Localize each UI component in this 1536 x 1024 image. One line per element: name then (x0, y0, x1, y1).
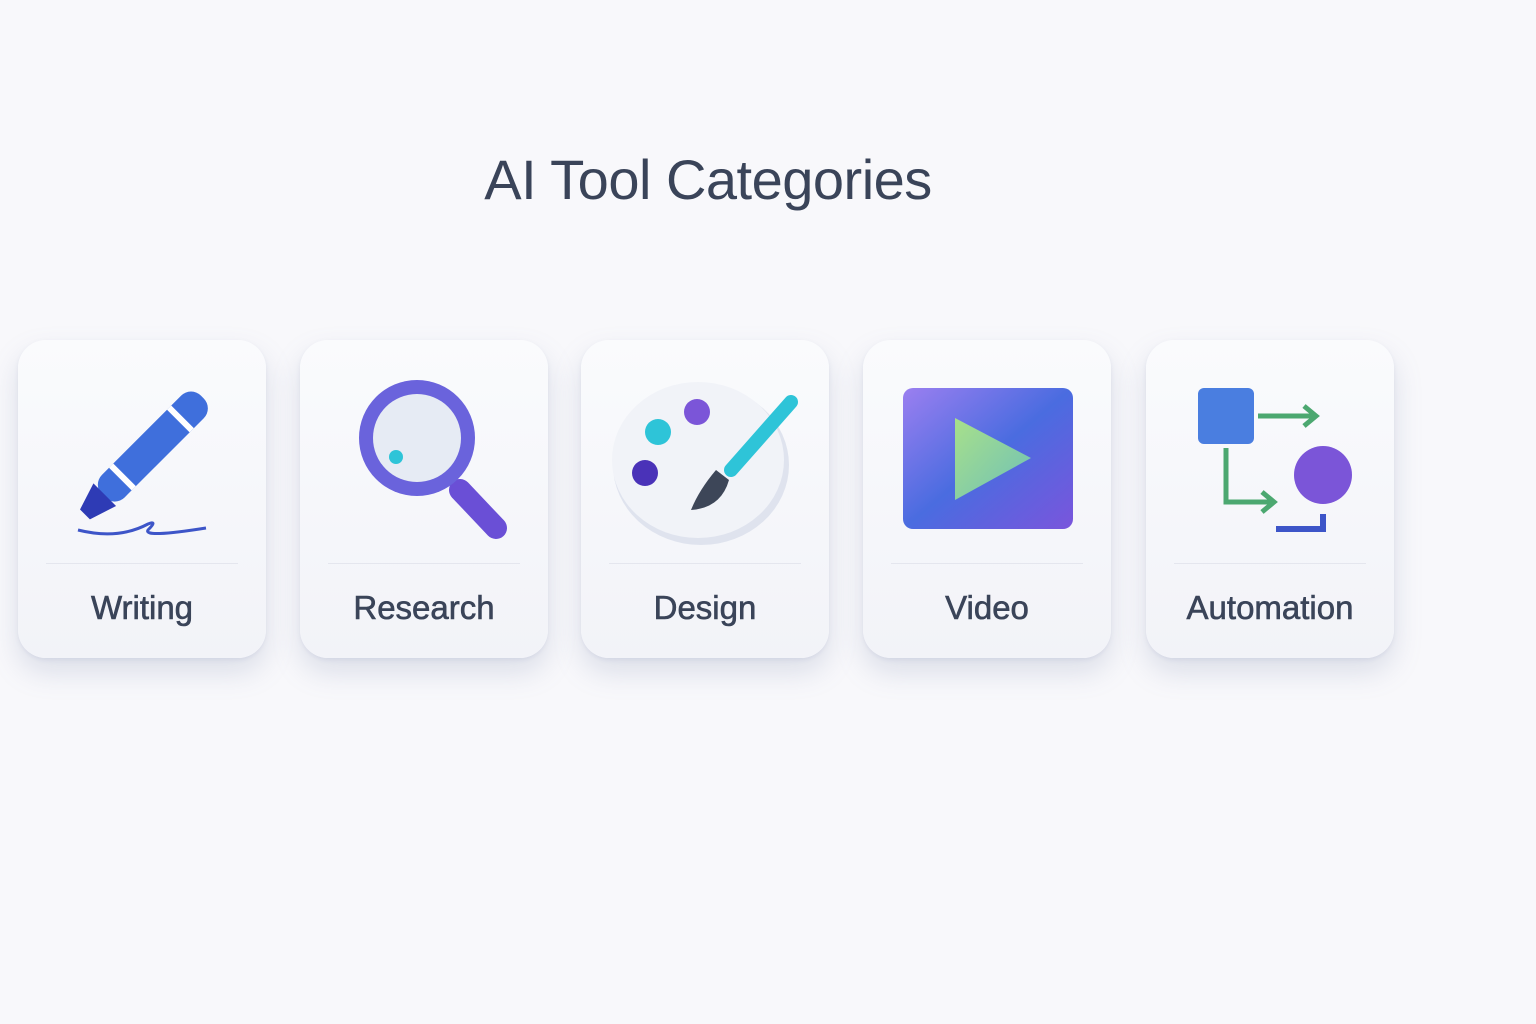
card: writing (18, 340, 266, 658)
label: Research (353, 589, 495, 626)
card: design (581, 340, 829, 658)
card: video (863, 340, 1111, 658)
label: Design (654, 589, 756, 626)
icon: magnifier (359, 380, 507, 539)
icon: pen (78, 392, 208, 536)
label: Writing (91, 589, 193, 626)
icon: palette (614, 395, 798, 545)
title: AI Tool Categories (484, 148, 932, 211)
label: Video (945, 589, 1029, 626)
icon: video player (903, 388, 1073, 529)
label: Automation (1187, 589, 1353, 626)
card: research (300, 340, 548, 658)
icon: workflow (1198, 388, 1352, 532)
card: automation (1146, 340, 1394, 658)
